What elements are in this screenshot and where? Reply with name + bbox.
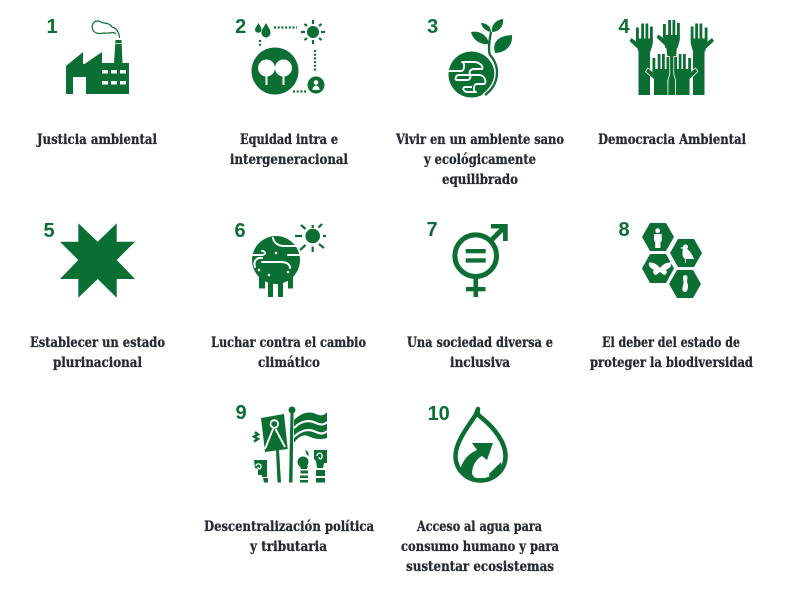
icon: factory — [66, 21, 129, 94]
number 2: 2 — [235, 16, 246, 38]
label: Acceso al agua para — [416, 519, 542, 535]
number 9: 9 — [235, 402, 247, 424]
label: Vivir en un ambiente sano — [395, 132, 564, 148]
number 6: 6 — [234, 220, 246, 242]
number 10: 10 — [428, 403, 450, 425]
icon: raised hands — [630, 20, 714, 95]
item 10: Acceso al agua — [401, 403, 559, 575]
item 1: Justicia ambiental — [36, 16, 157, 148]
label: sustentar ecosistemas — [406, 559, 554, 575]
label: inclusiva — [450, 355, 510, 371]
label: plurinacional — [53, 355, 142, 371]
icon: trees, water, sun and person cycle — [252, 20, 325, 94]
item 9: Descentralización política y tributaria — [204, 402, 374, 555]
item 3: Vivir en un ambiente sano — [395, 16, 564, 188]
icon: protest sign, flag and fists — [254, 406, 327, 482]
icon: earth with sprout — [448, 19, 512, 98]
label: Luchar contra el cambio — [211, 335, 366, 351]
icon: eight-pointed star — [60, 223, 135, 298]
label: Justicia ambiental — [36, 132, 157, 148]
item 5: Establecer un estado plurinacional — [30, 220, 165, 371]
label — [590, 335, 753, 371]
label: equilibrado — [442, 172, 518, 188]
icon: melting earth and sun — [252, 224, 326, 297]
item 4: Democracia Ambiental — [598, 16, 746, 148]
item 6: Luchar contra el cambio climático — [211, 220, 366, 371]
number 5: 5 — [43, 220, 55, 242]
icon: biodiversity hexagons — [642, 223, 702, 298]
label — [395, 132, 564, 188]
item 2: Equidad intra e intergeneracional — [230, 16, 348, 168]
number 7: 7 — [426, 219, 438, 241]
label — [407, 335, 553, 371]
label: climático — [258, 355, 320, 371]
icon: gender equality symbol — [455, 224, 508, 297]
number 4: 4 — [618, 16, 630, 38]
label: y tributaria — [249, 539, 327, 555]
label: Una sociedad diversa e — [407, 335, 553, 351]
number 3: 3 — [427, 16, 438, 38]
label: y ecológicamente — [423, 152, 536, 168]
number 1: 1 — [46, 16, 58, 38]
label: consumo humano y para — [401, 539, 559, 555]
label: Descentralización política — [204, 519, 374, 535]
icon: water drop with recycling arrow — [456, 409, 506, 481]
label: intergeneracional — [230, 152, 348, 168]
label: Establecer un estado — [30, 335, 165, 351]
label: Democracia Ambiental — [598, 132, 746, 148]
label: proteger la biodiversidad — [590, 355, 753, 371]
label — [204, 519, 374, 555]
label — [230, 132, 348, 168]
label: Equidad intra e — [240, 132, 338, 148]
item 8: El deber del estado de proteger la biodiversidad — [590, 219, 753, 371]
label — [211, 335, 366, 371]
label — [30, 335, 165, 371]
label — [401, 519, 559, 575]
label: El deber del estado de — [602, 335, 740, 351]
item 7: Una sociedad diversa e inclusiva — [407, 219, 553, 371]
number 8: 8 — [618, 219, 630, 241]
